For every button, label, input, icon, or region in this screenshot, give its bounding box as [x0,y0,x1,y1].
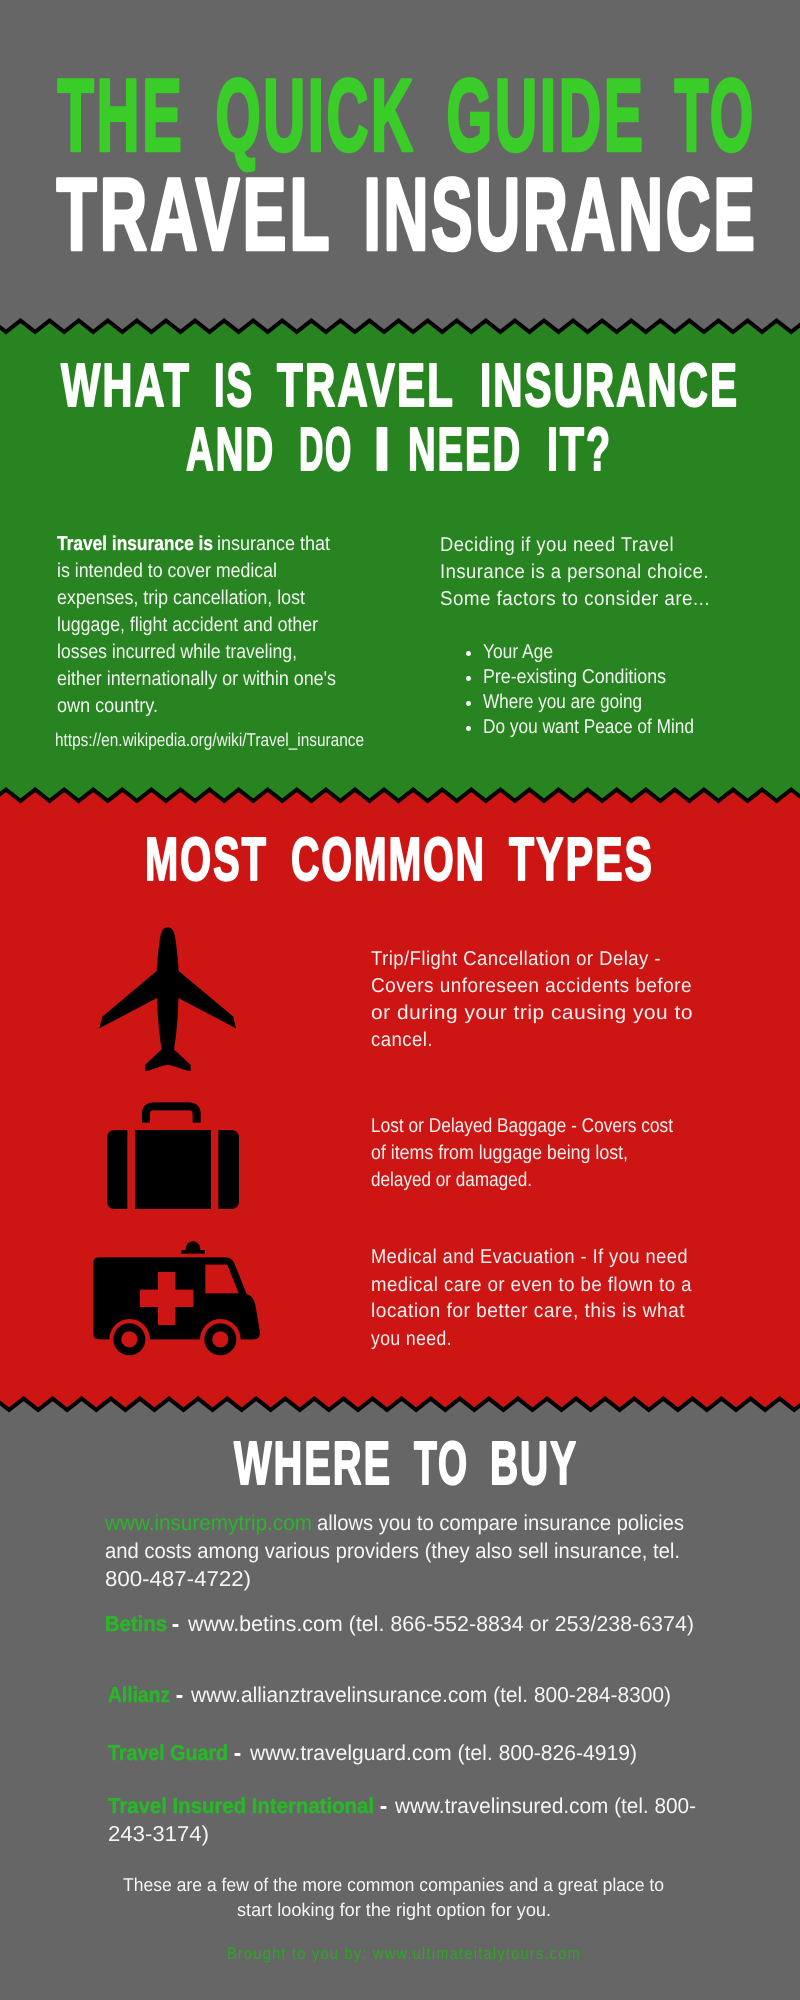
text: medical [371,1246,692,1350]
footer credit: Brought to you by: www.ultimateitalytours.com [227,1944,581,1963]
bullet list: factors: Pre-existing Conditions [483,666,666,688]
text: trip cancellation: Covers unforeseen accidents before [371,975,692,997]
text: travel insured international [108,1794,696,1846]
text block: deciding: Insurance is a personal choice. [440,561,709,583]
text block: deciding: Some factors to consider are... [440,588,710,610]
text: allianz: www.allianztravelinsurance.com (tel. 800-284-8300) [190,1683,671,1707]
heading: what is travel insurance [61,351,739,483]
text block: definition: is intended to cover medical [57,560,277,582]
text: travel insured international: 243-3174) [108,1822,209,1846]
text: trip cancellation [371,948,693,1051]
panel: most common types [0,790,800,1410]
heading: what is travel insurance: WHAT [61,351,191,419]
text: allianz: Allianz [108,1683,170,1707]
text: closing note [123,1874,664,1920]
title line 1: GUIDE [446,58,646,172]
text: travel insured international: - [380,1794,387,1818]
text: medical: you need. [371,1328,452,1350]
text: allianz: - [176,1683,183,1707]
bullet list: factors: Your Age [483,641,553,663]
text: baggage: of items from luggage being lost, [371,1142,628,1164]
text: betins: Betins [105,1612,167,1636]
text: insuremytrip: www.insuremytrip.com [104,1511,312,1535]
text block: definition: either internationally or within one's [57,668,336,690]
text block: definition: luggage, flight accident and other [57,614,318,636]
text block: definition: losses incurred while traveling, [57,641,297,663]
text: baggage: delayed or damaged. [371,1169,532,1191]
text: medical: medical care or even to be flown to a [371,1274,692,1296]
panel: where to buy [0,1398,800,2000]
heading: what is travel insurance: DO [299,415,353,483]
text block: definition: own country. [57,695,158,717]
title line 1 [58,58,756,172]
text: medical: location for better care, this is what [371,1300,685,1322]
heading: where to buy: BUY [490,1429,578,1497]
title line 1: THE [58,58,184,172]
text: betins: www.betins.com (tel. 866-552-8834 or 253/238-6374) [187,1612,694,1636]
text block: definition: insurance that [217,533,330,555]
text: trip cancellation: or during your trip causing you to [371,1002,693,1024]
heading: what is travel insurance: I [374,415,390,483]
heading: most common types [145,825,654,893]
text: closing note: start looking for the right option for you. [237,1899,551,1920]
icon: ambulance [93,1241,260,1351]
text: betins: - [172,1612,179,1636]
text: travel guard: - [234,1741,241,1765]
heading: what is travel insurance: IS [214,351,254,419]
text: trip cancellation: cancel. [371,1029,433,1051]
icon: airplane [99,927,236,1071]
panel: what is travel insurance [0,320,800,801]
bullet list: factors: Where you are going [483,691,642,713]
panel: page background and title [0,0,800,340]
text: insuremytrip: 800-487-4722) [105,1567,251,1591]
text: medical: Medical and Evacuation - If you need [371,1246,688,1268]
text: insuremytrip [104,1511,684,1591]
heading: what is travel insurance: IT? [547,415,612,483]
source link: https://en.wikipedia.org/wiki/Travel_insurance [55,729,364,750]
text: baggage: Lost or Delayed Baggage - Covers cost [371,1115,673,1137]
text block: definition: Travel insurance is [57,533,213,555]
heading: what is travel insurance: AND [186,415,275,483]
icon: suitcase [107,1106,239,1209]
text: travel guard: www.travelguard.com (tel. 800-826-4919) [249,1741,637,1765]
text: travel insured international: Travel Insured International [108,1794,374,1818]
title line 2 [56,156,758,272]
text block: definition: expenses, trip cancellation, lost [57,587,305,609]
text: closing note: These are a few of the more common companies and a great place to [123,1874,664,1895]
heading: most common types: MOST [145,825,268,893]
text: travel guard: Travel Guard [108,1741,228,1765]
title line 2: TRAVEL [56,156,332,272]
text: baggage [371,1115,673,1191]
text: travel insured international: www.travelinsured.com (tel. 800- [394,1794,696,1818]
bullet list: factors: Do you want Peace of Mind [483,716,694,738]
heading: most common types: COMMON [291,825,486,893]
heading: most common types: TYPES [509,825,654,893]
heading: where to buy: TO [414,1429,469,1497]
text block: deciding [440,534,710,610]
heading: what is travel insurance: TRAVEL [277,351,455,419]
heading: what is travel insurance: NEED [408,415,522,483]
text: insuremytrip: and costs among various providers (they also sell insurance, tel. [105,1539,680,1563]
title line 1: QUICK [216,58,416,172]
bullet list: factors [466,641,694,738]
heading: where to buy: WHERE [234,1429,392,1497]
text: trip cancellation: Trip/Flight Cancellation or Delay - [371,948,661,970]
text: insuremytrip: allows you to compare insurance policies [317,1511,684,1535]
text block: deciding: Deciding if you need Travel [440,534,674,556]
text block: definition [57,533,336,717]
